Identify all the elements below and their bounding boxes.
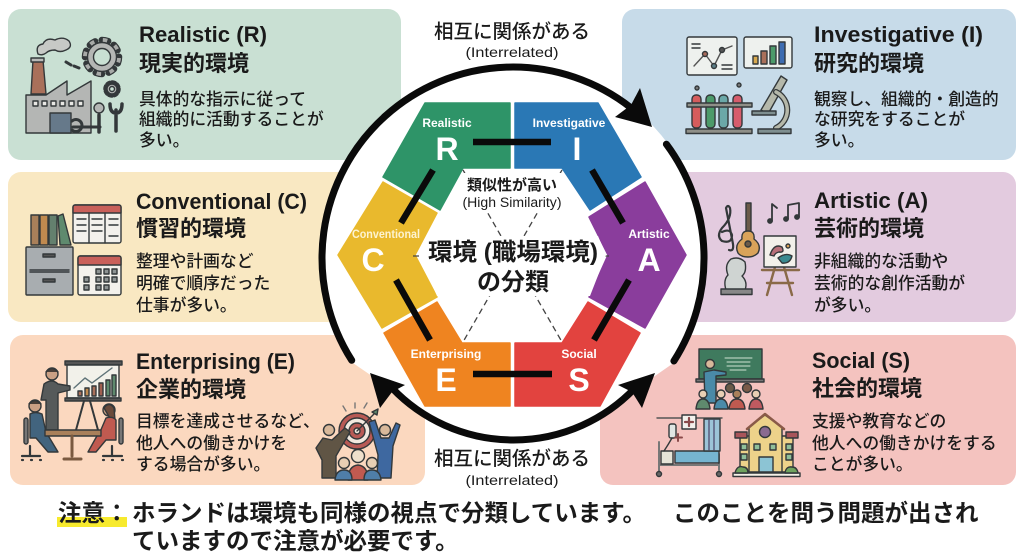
label: high similarity: (High Similarity) xyxy=(462,195,562,210)
panel: Realistic background xyxy=(8,9,401,160)
panel text: Realistic: 組織的に活動することが xyxy=(139,109,324,129)
panel text: Social: Social (S) xyxy=(812,348,910,373)
hexagon segment: Artistic: A xyxy=(637,242,661,278)
panel text: Realistic: 多い。 xyxy=(139,131,189,150)
heading: interrelated top: 相互に関係がある xyxy=(434,21,590,43)
heading: interrelated top: (Interrelated) xyxy=(466,44,558,60)
icon: business meeting with growth chart xyxy=(22,361,123,460)
panel text: Enterprising: 目標を達成させるなど、 xyxy=(136,412,320,431)
panel text: Enterprising: 企業的環境 xyxy=(136,377,246,402)
panel: Social background xyxy=(600,335,1016,485)
center title xyxy=(420,236,606,296)
panel text: Artistic: が多い。 xyxy=(814,295,881,315)
panel text: Enterprising: Enterprising (E) xyxy=(136,349,295,374)
hexagon segment: Social xyxy=(515,302,640,406)
center title: の分類 xyxy=(477,269,549,296)
panel text: Social: 支援や教育などの xyxy=(812,412,946,431)
hexagon segment: Conventional xyxy=(338,182,437,328)
hexagon segment: Investigative xyxy=(515,103,641,210)
hexagon segment: Conventional: Conventional xyxy=(352,227,420,241)
high similarity dashed lines xyxy=(413,170,610,342)
icon: school building xyxy=(733,414,800,476)
icon: clef, guitar, notes, easel and sculpture xyxy=(719,203,799,295)
panel: Artistic background xyxy=(630,172,1016,322)
hexagon segment: Investigative: Investigative xyxy=(533,116,606,130)
panel text: Investigative: 研究的環境 xyxy=(814,51,924,76)
hexagon segment: Social: Social xyxy=(561,347,597,361)
arrow: top ring arc xyxy=(322,67,652,360)
icon: team around a target xyxy=(316,403,400,480)
hexagon segment: Enterprising: Enterprising xyxy=(411,347,481,361)
center title: 環境 (職場環境) xyxy=(428,239,598,266)
panel text: Artistic: 芸術的環境 xyxy=(814,216,924,241)
hexagon segment: Social: S xyxy=(568,362,590,398)
panel: Conventional background xyxy=(8,172,408,322)
panel text: Realistic: Realistic (R) xyxy=(139,22,267,47)
icon: science charts, test tubes and microscope xyxy=(686,37,792,134)
panel text: Conventional: 明確で順序だった xyxy=(136,274,270,293)
panel text: Artistic: 芸術的な創作活動が xyxy=(814,273,965,293)
hexagon segment: Enterprising: E xyxy=(435,362,457,398)
panel text: Social xyxy=(812,348,997,474)
panel text: Social: 社会的環境 xyxy=(812,376,922,401)
label: high similarity: 類似性が高い xyxy=(467,176,557,194)
panel text: Artistic: Artistic (A) xyxy=(814,188,928,213)
heading: interrelated top xyxy=(434,21,590,60)
panel text: Social: ことが多い。 xyxy=(812,454,913,474)
panel text: Investigative: 観察し、組織的・創造的 xyxy=(814,90,999,109)
panel text: Realistic xyxy=(139,22,324,150)
label: high similarity xyxy=(462,173,563,211)
heading: interrelated bottom xyxy=(434,448,590,488)
hexagon segment: Conventional: C xyxy=(361,242,385,278)
panel text: Realistic: 具体的な指示に従って xyxy=(139,90,306,109)
heading: interrelated bottom: 相互に関係がある xyxy=(434,448,590,470)
icon: teacher at blackboard with students xyxy=(696,349,764,409)
hexagon segment: Enterprising xyxy=(384,302,510,406)
hexagon segment: Realistic: R xyxy=(435,131,459,167)
panel text: Conventional: 仕事が多い。 xyxy=(136,295,237,315)
hexagon segment: Artistic: Artistic xyxy=(628,227,670,241)
hexagon segment: Realistic xyxy=(383,103,510,210)
panel text: Conventional: 慣習的環境 xyxy=(136,216,246,241)
panel text: Conventional: 整理や計画など xyxy=(136,252,254,271)
bottom note: ホランドは環境も同様の視点で分類しています。 xyxy=(132,500,646,526)
panel text: Enterprising: 他人への働きかけを xyxy=(136,434,287,453)
panel text: Realistic: 現実的環境 xyxy=(139,51,249,76)
arrow: bottom double-headed arc xyxy=(370,373,655,440)
panel text: Artistic xyxy=(814,188,965,315)
bottom note: ていますので注意が必要です。 xyxy=(132,527,459,554)
bottom note: このことを問う問題が出され xyxy=(673,499,978,526)
black link bars between neighbouring types xyxy=(396,142,629,374)
panel: Enterprising background xyxy=(10,335,425,485)
icon: binders, filing cabinet and calendars xyxy=(26,205,121,295)
panel text: Social: 他人への働きかけをする xyxy=(812,434,997,453)
panel: Investigative background xyxy=(622,9,1016,160)
note highlight xyxy=(57,517,127,527)
bottom note: 注意： xyxy=(58,500,128,526)
panel text: Conventional xyxy=(136,189,307,315)
hexagon segment: Realistic: Realistic xyxy=(422,116,472,130)
central white disc xyxy=(322,67,704,440)
bottom note xyxy=(58,499,978,554)
icon: factory, gears and wrenches xyxy=(26,38,122,133)
hexagon segment: Investigative: I xyxy=(573,131,581,167)
panel text: Enterprising: する場合が多い。 xyxy=(136,454,270,474)
panel text: Artistic: 非組織的な活動や xyxy=(814,252,948,271)
panel text: Investigative xyxy=(814,22,999,150)
panel text: Enterprising xyxy=(136,349,320,474)
panel text: Investigative: な研究をすることが xyxy=(814,109,965,129)
heading: interrelated bottom: (Interrelated) xyxy=(466,472,558,488)
arrow: right ring arc xyxy=(666,144,704,361)
panel text: Conventional: Conventional (C) xyxy=(136,189,307,214)
icon: hospital bed with drip xyxy=(656,415,722,476)
panel text: Investigative: Investigative (I) xyxy=(814,22,983,47)
hexagon segment: Artistic xyxy=(589,182,686,328)
panel text: Investigative: 多い。 xyxy=(814,131,864,150)
